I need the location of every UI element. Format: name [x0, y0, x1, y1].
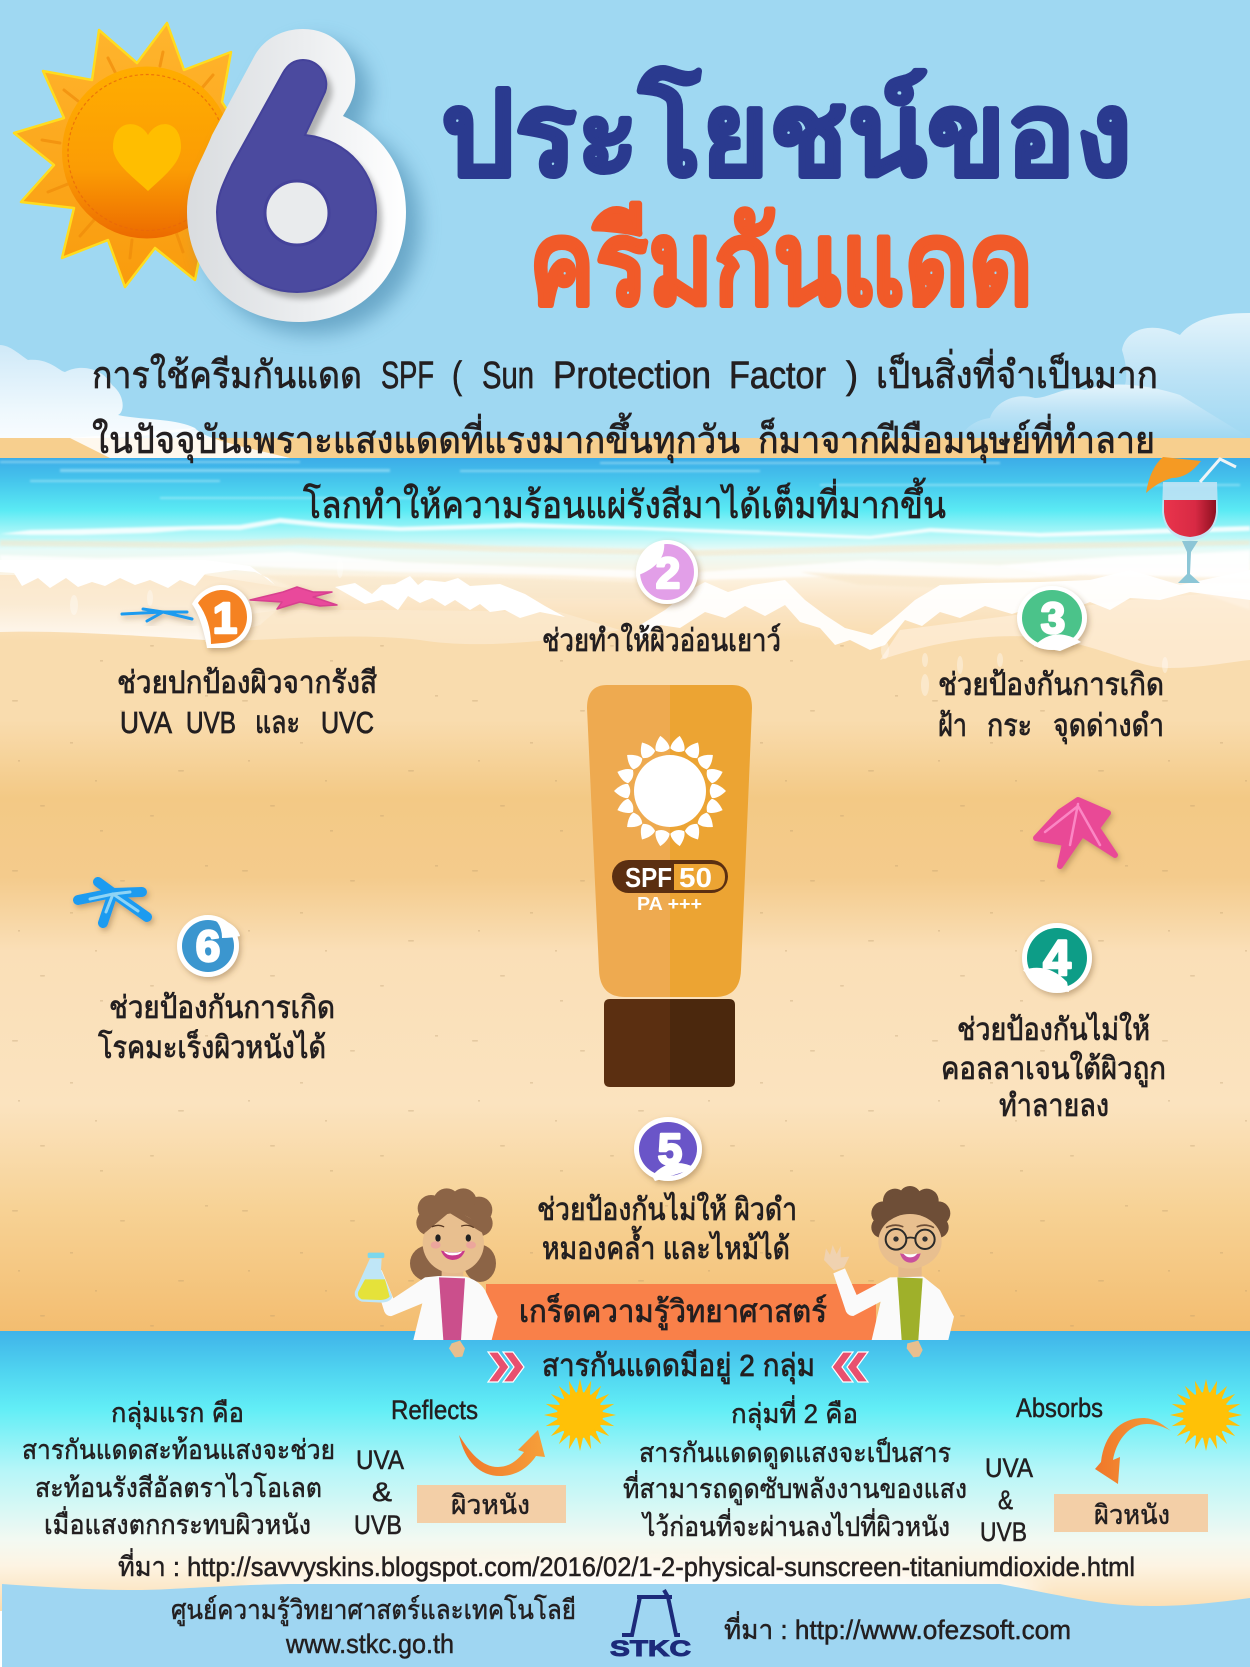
- benefit 1 UV list: และ: [255, 705, 300, 740]
- absorbs label: Absorbs: [1016, 1393, 1103, 1423]
- sun icon: [544, 1379, 616, 1451]
- wet sand left: [0, 575, 300, 640]
- PA rating: PA +++: [637, 894, 702, 914]
- benefit 3 second line: จุดด่างดำ: [1053, 708, 1164, 745]
- badge 4: [1022, 923, 1092, 993]
- reflects label: Reflects: [391, 1395, 478, 1425]
- beach and sea gradient: [0, 458, 1250, 1331]
- intro paragraph: เป็นสิ่งที่จำเป็นมาก: [876, 349, 1158, 397]
- number 6 shadow: [201, 41, 420, 334]
- cocktail glass: [1146, 457, 1236, 583]
- group one text: กลุ่มแรก คือ: [111, 1398, 244, 1430]
- intro paragraph: ก็มาจากฝีมือมนุษย์ที่ทำลาย: [758, 414, 1155, 463]
- absorbs diagram: [980, 1379, 1242, 1547]
- section heading: สารกันแดดมีอยู่ 2 กลุ่ม: [542, 1348, 815, 1385]
- number 6 purple face: [217, 60, 376, 292]
- group one text: เมื่อแสงตกกระทบผิวหนัง: [44, 1506, 311, 1540]
- intro paragraph: [92, 349, 1158, 527]
- footer organisation: [171, 1594, 576, 1659]
- intro paragraph: โลกทำให้ความร้อนแผ่รังสีมาได้เต็มที่มากขึ้น: [303, 477, 946, 527]
- SPF pill: [612, 860, 728, 893]
- footer organisation: www.stkc.go.th: [285, 1629, 454, 1659]
- intro paragraph: (: [452, 355, 462, 397]
- wet sand right: [880, 590, 1250, 668]
- UV labels: UVB: [980, 1517, 1027, 1547]
- foam wave center: [335, 576, 565, 618]
- reflect arrow: [459, 1430, 545, 1476]
- right chevrons: [832, 1352, 868, 1382]
- SPF pill: SPF: [625, 862, 672, 893]
- sunscreen tube: [587, 685, 752, 1087]
- benefit 1 UV list: UVB: [186, 705, 236, 740]
- benefit 3 second line: ฝ้า: [938, 708, 967, 743]
- science tip banner: [486, 1284, 876, 1340]
- intro paragraph: Factor: [729, 355, 826, 397]
- title: [441, 69, 1132, 330]
- surf foam bands: [0, 518, 1250, 610]
- benefit 3: [938, 586, 1164, 745]
- big number 6: [187, 29, 420, 334]
- scientist man: [824, 1186, 954, 1357]
- cream surf bands: [0, 538, 1250, 600]
- lower sea panel: [0, 1331, 1250, 1611]
- white glow above footer: [240, 1568, 1040, 1616]
- sand speckles: [0, 640, 1250, 1331]
- group one text: สารกันแดดสะท้อนแสงจะช่วย: [22, 1435, 335, 1465]
- badge 6: 6: [196, 922, 220, 971]
- tube body right: [670, 685, 752, 997]
- glass bowl: [1162, 482, 1218, 541]
- sky background: [0, 0, 1250, 458]
- UV labels: [354, 1445, 404, 1540]
- number 6 inner shadow: [223, 67, 382, 299]
- cloud right lower: [960, 385, 1250, 438]
- benefit 1 UV list: UVC: [321, 705, 374, 740]
- benefit 6 text: ช่วยป้องกันการเกิด: [109, 990, 335, 1025]
- group two text: [623, 1395, 967, 1542]
- UV labels: &: [372, 1477, 392, 1507]
- skin box: ผิวหนัง: [451, 1490, 530, 1520]
- benefit 3 second line: กระ: [987, 708, 1032, 743]
- badge 3: [1017, 586, 1087, 651]
- tube sun icon: [614, 735, 726, 847]
- sun illustration: [14, 23, 240, 287]
- benefit 6: โรคมะเร็งผิวหนังได้: [98, 1029, 326, 1065]
- benefit 3 second line: [938, 708, 1164, 745]
- benefit 4: [941, 923, 1166, 1123]
- benefit 5 text: ช่วยป้องกันไม่ให้ ผิวดำ: [537, 1192, 797, 1227]
- title line 2: ครีมกันแดด: [529, 198, 1033, 330]
- intro paragraph: ): [846, 355, 858, 397]
- benefit 5: [537, 1117, 797, 1266]
- skin box: ผิวหนัง: [1094, 1500, 1170, 1530]
- wine: [1164, 500, 1216, 537]
- left chevrons: [488, 1352, 524, 1382]
- badge 3: 3: [1041, 594, 1065, 643]
- intro paragraph: การใช้ครีมกันแดด: [92, 354, 362, 397]
- benefit 5: หมองคล้ำ และไหม้ได้: [542, 1226, 790, 1266]
- sun disc stitching: [68, 74, 226, 230]
- wet sand center: [205, 610, 620, 644]
- badge 4: 4: [1043, 930, 1071, 986]
- science tip banner: เกร็ดความรู้วิทยาศาสตร์: [519, 1293, 827, 1330]
- benefit 3 text: ช่วยป้องกันการเกิด: [938, 667, 1164, 702]
- group two text: ที่สามารถดูดซับพลังงานของแสง: [623, 1470, 967, 1505]
- heart: [113, 124, 181, 191]
- sun icon: [1170, 1379, 1242, 1451]
- UV labels: [980, 1453, 1033, 1547]
- straw: [1200, 459, 1236, 482]
- benefit 4: คอลลาเจนใต้ผิวถูก: [941, 1051, 1166, 1087]
- scientist woman: [355, 1188, 498, 1357]
- badge 5: [634, 1117, 702, 1181]
- absorb arrow: [1095, 1418, 1171, 1484]
- cloud right main: [1122, 313, 1250, 438]
- sun rays: [14, 23, 240, 287]
- water droplets: [70, 558, 1168, 696]
- cloud left base over sand: [70, 428, 290, 458]
- footer band: [2, 1584, 1250, 1667]
- source line: ที่มา : http://savvyskins.blogspot.com/2016/02/1-2-physical-sunscreen-titaniumdioxide.html: [118, 1548, 1135, 1582]
- starfish blue large: [78, 882, 147, 923]
- benefit 1: [117, 585, 377, 740]
- starfish pink large: [1036, 800, 1115, 866]
- benefit 4: ทำลายลง: [999, 1088, 1109, 1123]
- STKC logo: STKC: [610, 1636, 691, 1661]
- footer source: ที่มา : http://www.ofezsoft.com: [724, 1611, 1071, 1645]
- badge 6: [177, 915, 240, 977]
- badge 2: 2: [656, 549, 680, 598]
- badge 1: [192, 585, 252, 648]
- umbrella: [1146, 457, 1201, 493]
- footer organisation: ศูนย์ความรู้วิทยาศาสตร์และเทคโนโลยี: [171, 1594, 576, 1626]
- UV labels: UVA: [356, 1445, 404, 1475]
- benefit 1 text: ช่วยปกป้องผิวจากรังสี: [117, 665, 377, 700]
- intro paragraph: ในปัจจุบันเพราะแสงแดดที่แรงมากขึ้นทุกวัน: [92, 412, 740, 463]
- sun ray creases: [42, 52, 213, 258]
- badge 5: 5: [658, 1125, 682, 1174]
- reflects diagram: [354, 1379, 616, 1540]
- group two text: สารกันแดดดูดแสงจะเป็นสาร: [639, 1435, 951, 1469]
- cloud left: [0, 345, 195, 438]
- benefit 6: [98, 915, 335, 1065]
- UV labels: &: [998, 1485, 1013, 1515]
- intro paragraph: Sun: [482, 355, 534, 397]
- benefit 1 UV list: UVA: [120, 705, 172, 740]
- tube cap left: [604, 999, 670, 1087]
- skin box: [417, 1485, 566, 1523]
- benefit 2: [542, 540, 781, 658]
- intro paragraph: Protection: [553, 355, 711, 397]
- skin box: [1054, 1494, 1208, 1532]
- badge 2: [636, 540, 698, 604]
- sun disc: [62, 66, 232, 238]
- SPF pill: 50: [679, 862, 712, 893]
- group two text: กลุ่มที่ 2 คือ: [731, 1395, 858, 1431]
- foam wave center right: [640, 570, 1250, 650]
- STKC logo: [610, 1590, 691, 1661]
- starfish blue small: [122, 609, 192, 621]
- benefit 1 UV list: [120, 705, 374, 740]
- tube body left: [587, 685, 670, 997]
- foam wave left: [0, 560, 275, 588]
- glass stem: [1178, 541, 1200, 583]
- benefit 2 text: ช่วยทำให้ผิวอ่อนเยาว์: [542, 623, 781, 658]
- UV labels: UVA: [985, 1453, 1033, 1483]
- starfish pink small: [250, 587, 337, 609]
- far sand strip: [0, 438, 1250, 458]
- UV labels: UVB: [354, 1510, 402, 1540]
- group one text: [22, 1398, 335, 1540]
- sea highlights: [0, 461, 1240, 499]
- group one text: สะท้อนรังสีอัลตราไวโอเลต: [35, 1473, 322, 1503]
- benefit 4 text: ช่วยป้องกันไม่ให้: [957, 1012, 1150, 1047]
- intro paragraph: SPF: [381, 355, 434, 397]
- number 6 counter: [265, 181, 329, 245]
- number 6 white backing: [187, 29, 406, 322]
- badge 1: 1: [213, 594, 237, 643]
- title line 1: ประโยชน์ของ: [441, 69, 1132, 201]
- group two text: ไว้ก่อนที่จะผ่านลงไปที่ผิวหนัง: [641, 1508, 950, 1542]
- tube cap right: [670, 999, 735, 1087]
